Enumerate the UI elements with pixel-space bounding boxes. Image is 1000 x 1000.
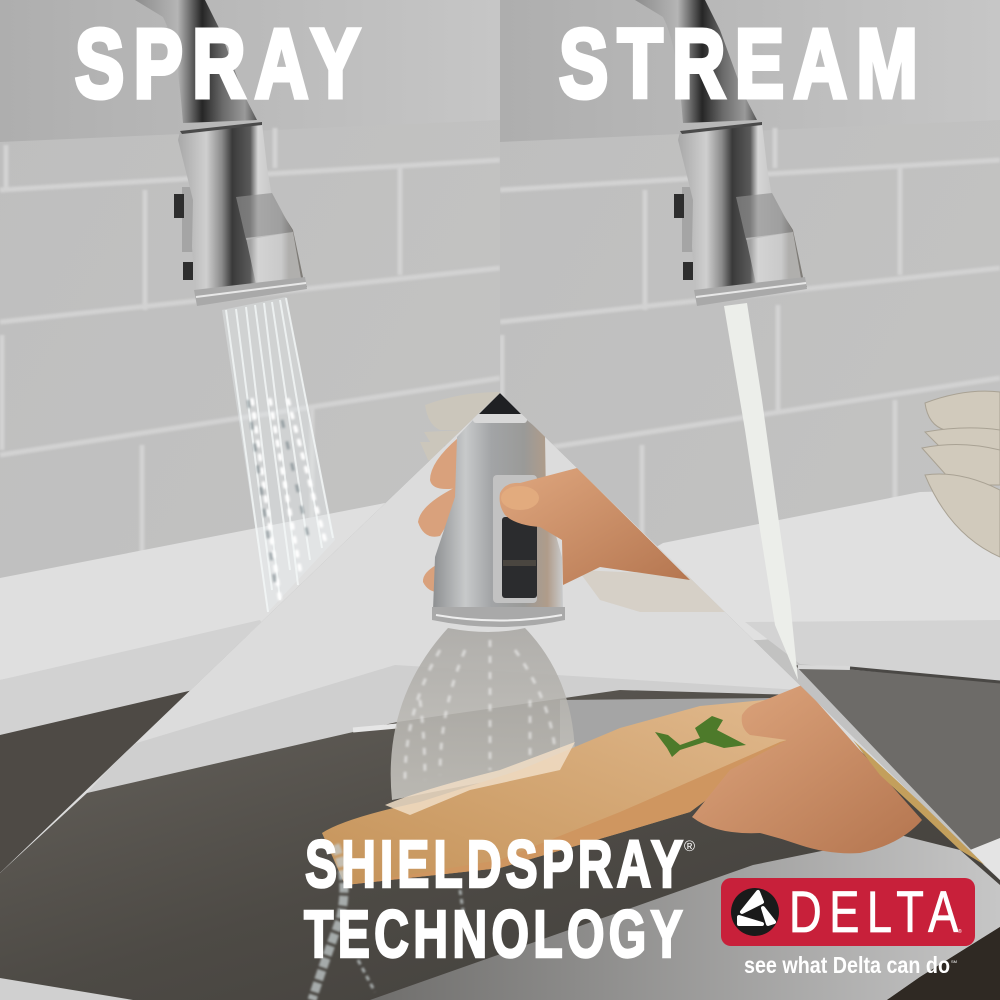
icon: stream water (724, 303, 798, 680)
icon: faucet with stream head (635, 0, 807, 306)
icon: fingers behind spray head (418, 438, 458, 592)
logo: delta (721, 878, 975, 946)
heading: shieldspray technology: SHIELDSPRAY (305, 827, 683, 902)
icon: herbs (655, 716, 746, 757)
icon: dark sink corner (887, 927, 1000, 1000)
logo: delta: DELTA (789, 881, 959, 945)
tagline: see what Delta can do (744, 952, 950, 978)
heading: shieldspray technology: TECHNOLOGY (304, 897, 683, 972)
icon: spray water (222, 297, 335, 612)
icon: gold board edge (853, 740, 993, 870)
icon: bowls (420, 392, 500, 462)
icon: faucet with spray head (135, 0, 307, 306)
heading: stream: STREAM (559, 10, 918, 118)
panel: shieldspray scene (0, 390, 1000, 1000)
heading: shieldspray technology (304, 827, 695, 972)
icon: hand on spray head (500, 468, 690, 585)
icon: handheld spray head (432, 393, 565, 627)
icon: splash on board (385, 742, 575, 815)
panel: stream scene (500, 0, 1000, 900)
icon: cutting board (322, 700, 787, 885)
icon: bowls (922, 391, 1000, 557)
panel: spray scene (0, 0, 500, 900)
icon: lower counter (370, 835, 1000, 1000)
icon: board front edge (345, 740, 787, 885)
icon: water below board (312, 845, 465, 1000)
heading: shieldspray technology: ® (684, 838, 695, 855)
icon: water bell (391, 628, 575, 800)
logo: delta: ® (958, 928, 962, 935)
tagline: SM (951, 959, 957, 964)
icon: hand holding board (692, 685, 922, 853)
heading: spray: SPRAY (75, 10, 360, 118)
